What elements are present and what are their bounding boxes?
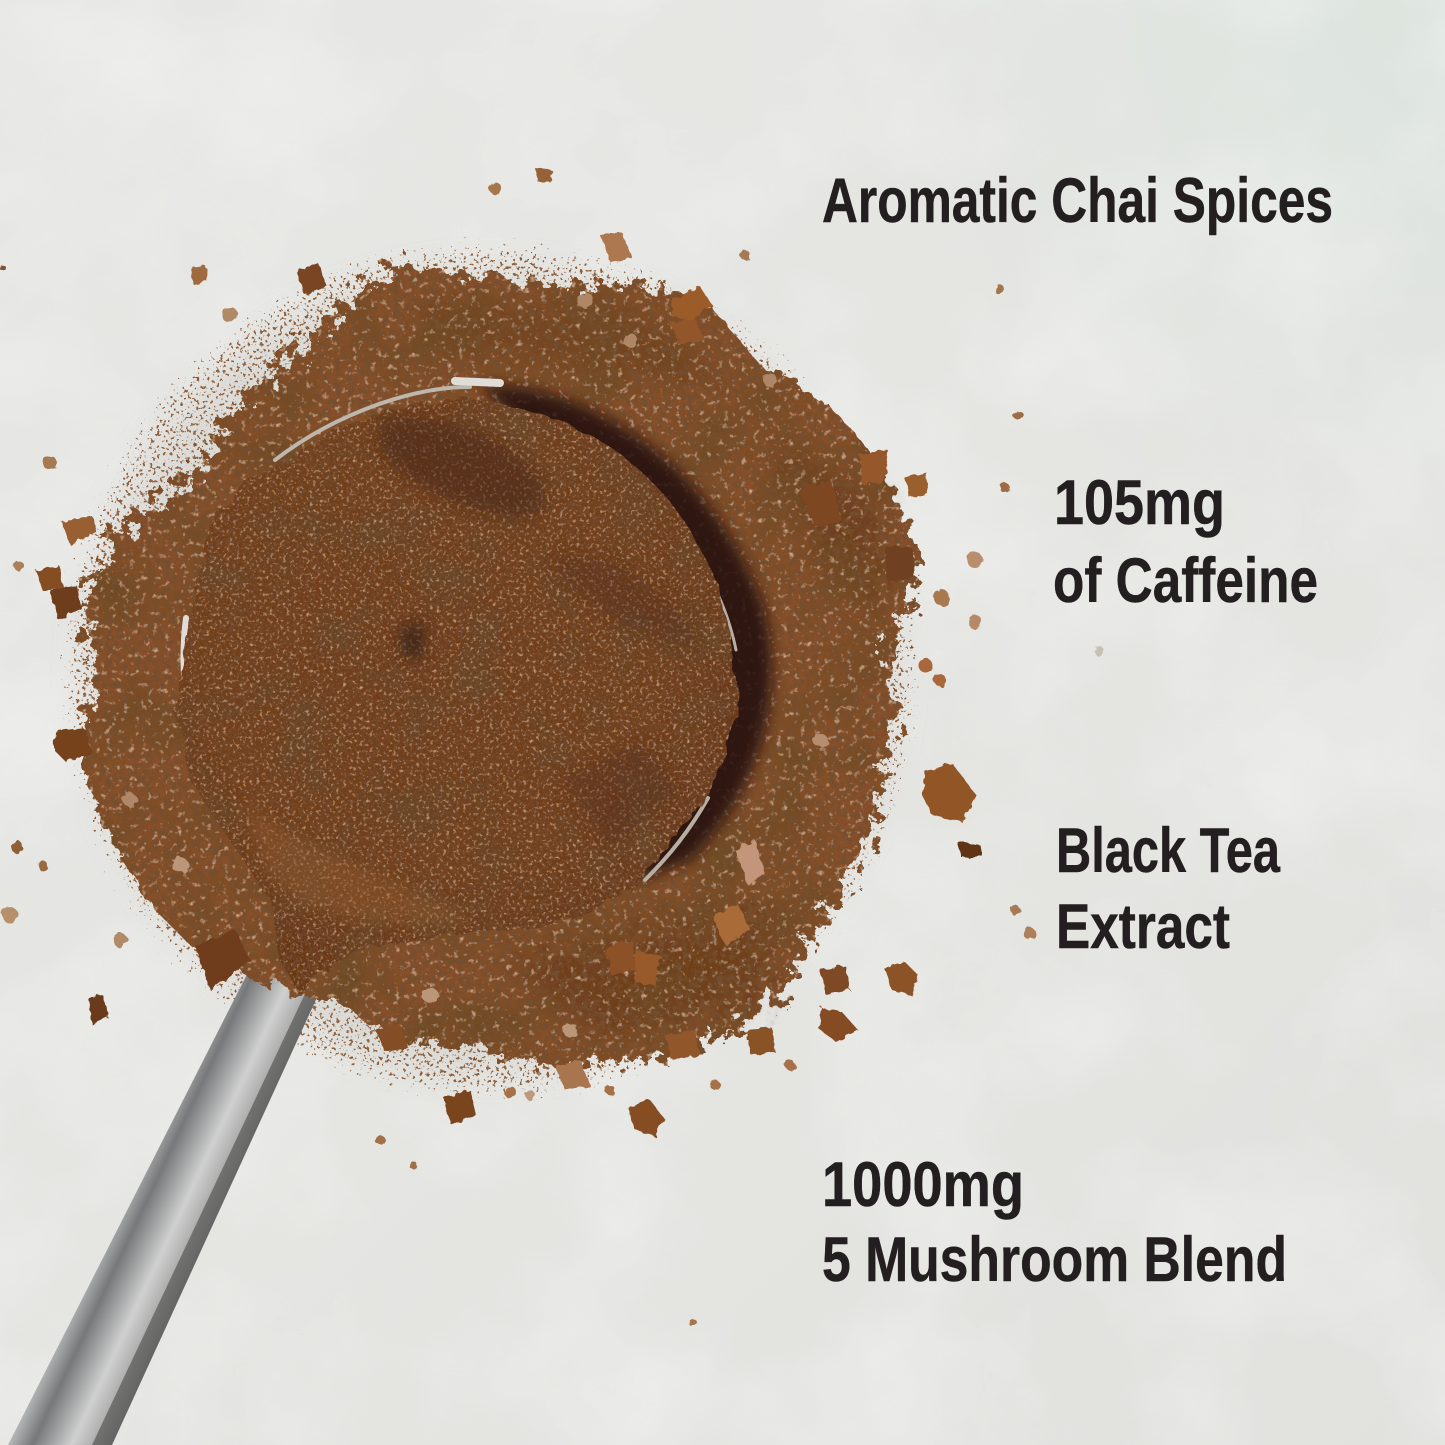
spoon bowl rim: [184, 381, 736, 880]
label: 105mg of caffeine: of Caffeine: [1053, 546, 1318, 616]
dark shadow beside spoon: [480, 385, 772, 880]
spoon handle: [8, 925, 335, 1445]
outer powder pile: [80, 262, 915, 1070]
label: 1000mg 5 mushroom blend: 5 Mushroom Blend: [822, 1225, 1287, 1295]
label: 1000mg 5 mushroom blend: 1000mg: [822, 1150, 1024, 1220]
label: black tea extract: Black Tea: [1056, 816, 1281, 886]
label: black tea extract: [1056, 816, 1281, 962]
darker top folds of powder: [240, 418, 700, 923]
label: black tea extract: Extract: [1056, 892, 1230, 962]
inner heaped powder on spoon: [175, 399, 737, 995]
label: 1000mg 5 mushroom blend: [822, 1150, 1287, 1295]
label: 105mg of caffeine: [1053, 468, 1318, 616]
fine scattered dust around pile: [0, 170, 990, 1170]
coarse crumbs and sugar around pile: [0, 168, 1105, 1326]
label: 105mg of caffeine: 105mg: [1054, 468, 1225, 538]
soft shadow under powder: [85, 270, 895, 1070]
